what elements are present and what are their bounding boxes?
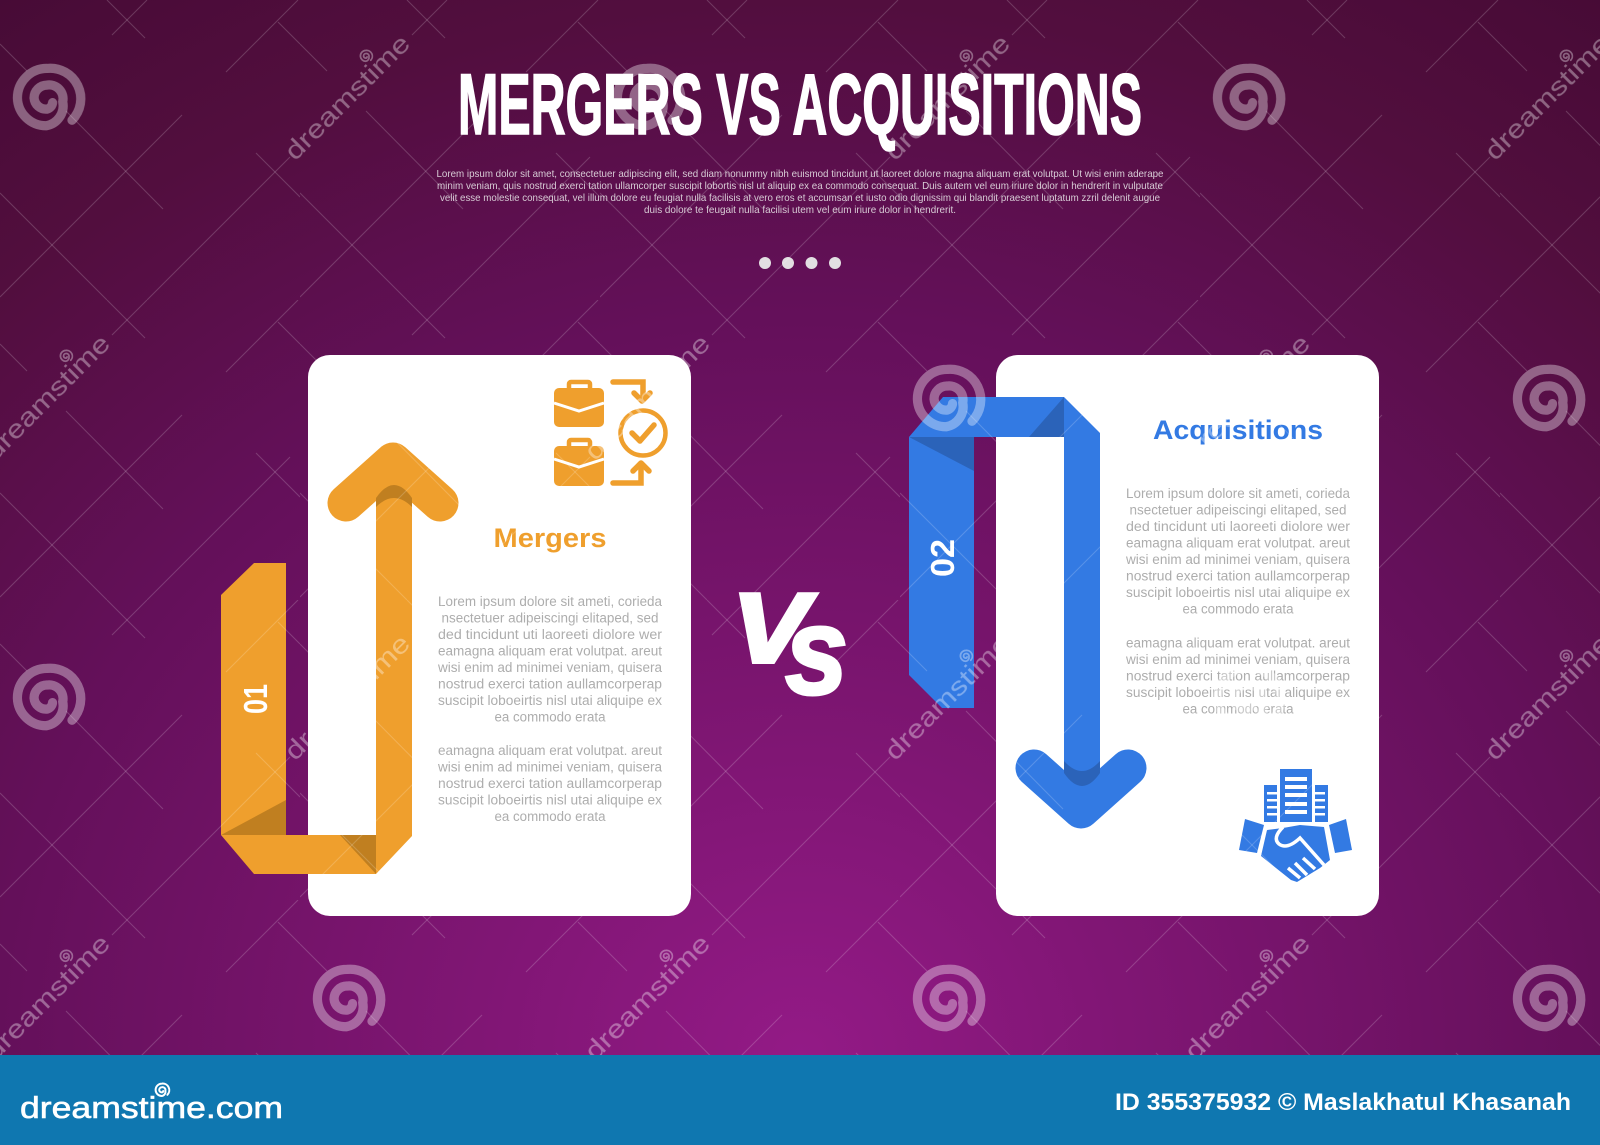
step number 02: 02 bbox=[924, 539, 961, 577]
header description text: velit esse molestie consequat, vel illum dolore eu feugiat nulla facilisis at vero eros et accumsan et iusto odio dignissim qui blandit praesent luptatum zzril delenit augue bbox=[440, 192, 1160, 204]
versus label: V bbox=[732, 573, 817, 683]
footer logo: dreamstime.com bbox=[20, 1090, 283, 1125]
body text: mergers: suscipit loboeirtis nisl utai aliquipe ex bbox=[438, 693, 662, 708]
body text: acquisitions: eamagna aliquam erat volutpat. areut bbox=[1126, 636, 1350, 650]
body text: mergers: ded tincidunt uti laoreeti diolore wer bbox=[438, 627, 663, 642]
footer bar bbox=[0, 1055, 1600, 1145]
step number 01: 01 bbox=[237, 684, 274, 714]
body text: acquisitions: suscipit loboeirtis nisl utai aliquipe ex bbox=[1126, 585, 1350, 600]
body text: mergers: Lorem ipsum dolore sit ameti, corieda bbox=[438, 594, 662, 609]
panel: mergers bbox=[221, 355, 691, 916]
body text: acquisitions bbox=[1125, 486, 1351, 716]
body text: mergers: nostrud exerci tation aullamcorperap bbox=[438, 676, 662, 692]
body text: mergers: ea commodo erata bbox=[494, 809, 606, 824]
panel: acquisitions bbox=[909, 355, 1379, 916]
watermark overlay: dreamstime text: dreamstime bbox=[1478, 628, 1600, 766]
icon: briefcases merging bbox=[554, 382, 666, 486]
body text: acquisitions: nsectetuer adipeiscingi elitaped, sed bbox=[1130, 502, 1346, 518]
arrow: orange ribbon up bbox=[221, 461, 440, 874]
watermark overlay: dreamstime text: dreamstime bbox=[878, 28, 1016, 166]
body text: acquisitions: nostrud exerci tation aullamcorperap bbox=[1126, 668, 1350, 684]
body text: acquisitions: wisi enim ad minimei veniam, quisera bbox=[1125, 552, 1350, 567]
body text: acquisitions: suscipit loboeirtis nisl utai aliquipe ex bbox=[1126, 685, 1350, 700]
body text: mergers: suscipit loboeirtis nisl utai aliquipe ex bbox=[438, 792, 662, 808]
watermark overlay: dreamstime text: dreamstime bbox=[1178, 928, 1316, 1066]
footer credit: ID 355375932 © Maslakhatul Khasanah bbox=[1115, 1089, 1571, 1116]
watermark overlay: dreamstime text: dreamstime bbox=[578, 928, 716, 1066]
body text: mergers bbox=[437, 594, 663, 824]
body text: acquisitions: eamagna aliquam erat volutpat. areut bbox=[1126, 536, 1350, 550]
body text: acquisitions: Lorem ipsum dolore sit ameti, corieda bbox=[1126, 486, 1350, 501]
body text: mergers: eamagna aliquam erat volutpat. areut bbox=[438, 743, 662, 758]
body text: acquisitions: ded tincidunt uti laoreeti diolore wer bbox=[1126, 519, 1351, 534]
body text: mergers: wisi enim ad minimei veniam, quisera bbox=[437, 660, 662, 675]
heading: mergers: Mergers bbox=[494, 523, 606, 553]
body text: mergers: eamagna aliquam erat volutpat. areut bbox=[438, 644, 662, 658]
body text: mergers: ea commodo erata bbox=[494, 710, 606, 724]
versus label bbox=[732, 573, 848, 721]
body text: acquisitions: ea commodo erata bbox=[1182, 602, 1294, 616]
watermark overlay: dreamstime text: dreamstime bbox=[278, 628, 416, 766]
pagination dots bbox=[759, 257, 841, 269]
heading: acquisitions: Acquisitions bbox=[1153, 415, 1323, 445]
card background: acquisitions bbox=[996, 355, 1379, 916]
body text: acquisitions: ea commodo erata bbox=[1182, 702, 1294, 716]
body text: mergers: nostrud exerci tation aullamcorperap bbox=[438, 776, 662, 791]
header description text bbox=[436, 168, 1164, 216]
body text: acquisitions: wisi enim ad minimei veniam, quisera bbox=[1125, 652, 1350, 667]
header description text: Lorem ipsum dolor sit amet, consectetuer adipiscing elit, sed diam nonummy nibh euismod tincidunt ut laoreet dolore magna aliquam erat volutpat. Ut wisi enim aderape bbox=[436, 168, 1164, 180]
header description text: duis dolore te feugait nulla facilisi utem vel eum iriure dolor in hendrerit. bbox=[644, 204, 956, 216]
arrow: blue ribbon down bbox=[909, 397, 1128, 810]
header description text: minim veniam, quis nostrud exerci tation ullamcorper suscipit lobortis nisl ut aliquip ex ea commodo consequat. Duis autem vel eum iriure dolor in hendrerit in vulputate bbox=[437, 180, 1163, 192]
versus label: s bbox=[785, 583, 848, 721]
icon: buildings and handshake bbox=[1239, 769, 1352, 882]
watermark overlay: dreamstime text: dreamstime bbox=[278, 28, 416, 166]
card background: mergers bbox=[308, 355, 691, 916]
body text: mergers: nsectetuer adipeiscingi elitaped, sed bbox=[442, 610, 658, 626]
watermark overlay: dreamstime text: dreamstime bbox=[1178, 328, 1316, 466]
body text: acquisitions: nostrud exerci tation aullamcorperap bbox=[1126, 568, 1350, 584]
body text: mergers: wisi enim ad minimei veniam, quisera bbox=[437, 760, 662, 774]
watermark overlay: dreamstime text: dreamstime bbox=[1478, 28, 1600, 166]
watermark overlay: dreamstime text: dreamstime bbox=[578, 328, 716, 466]
watermark overlay: dreamstime text: dreamstime bbox=[878, 628, 1016, 766]
